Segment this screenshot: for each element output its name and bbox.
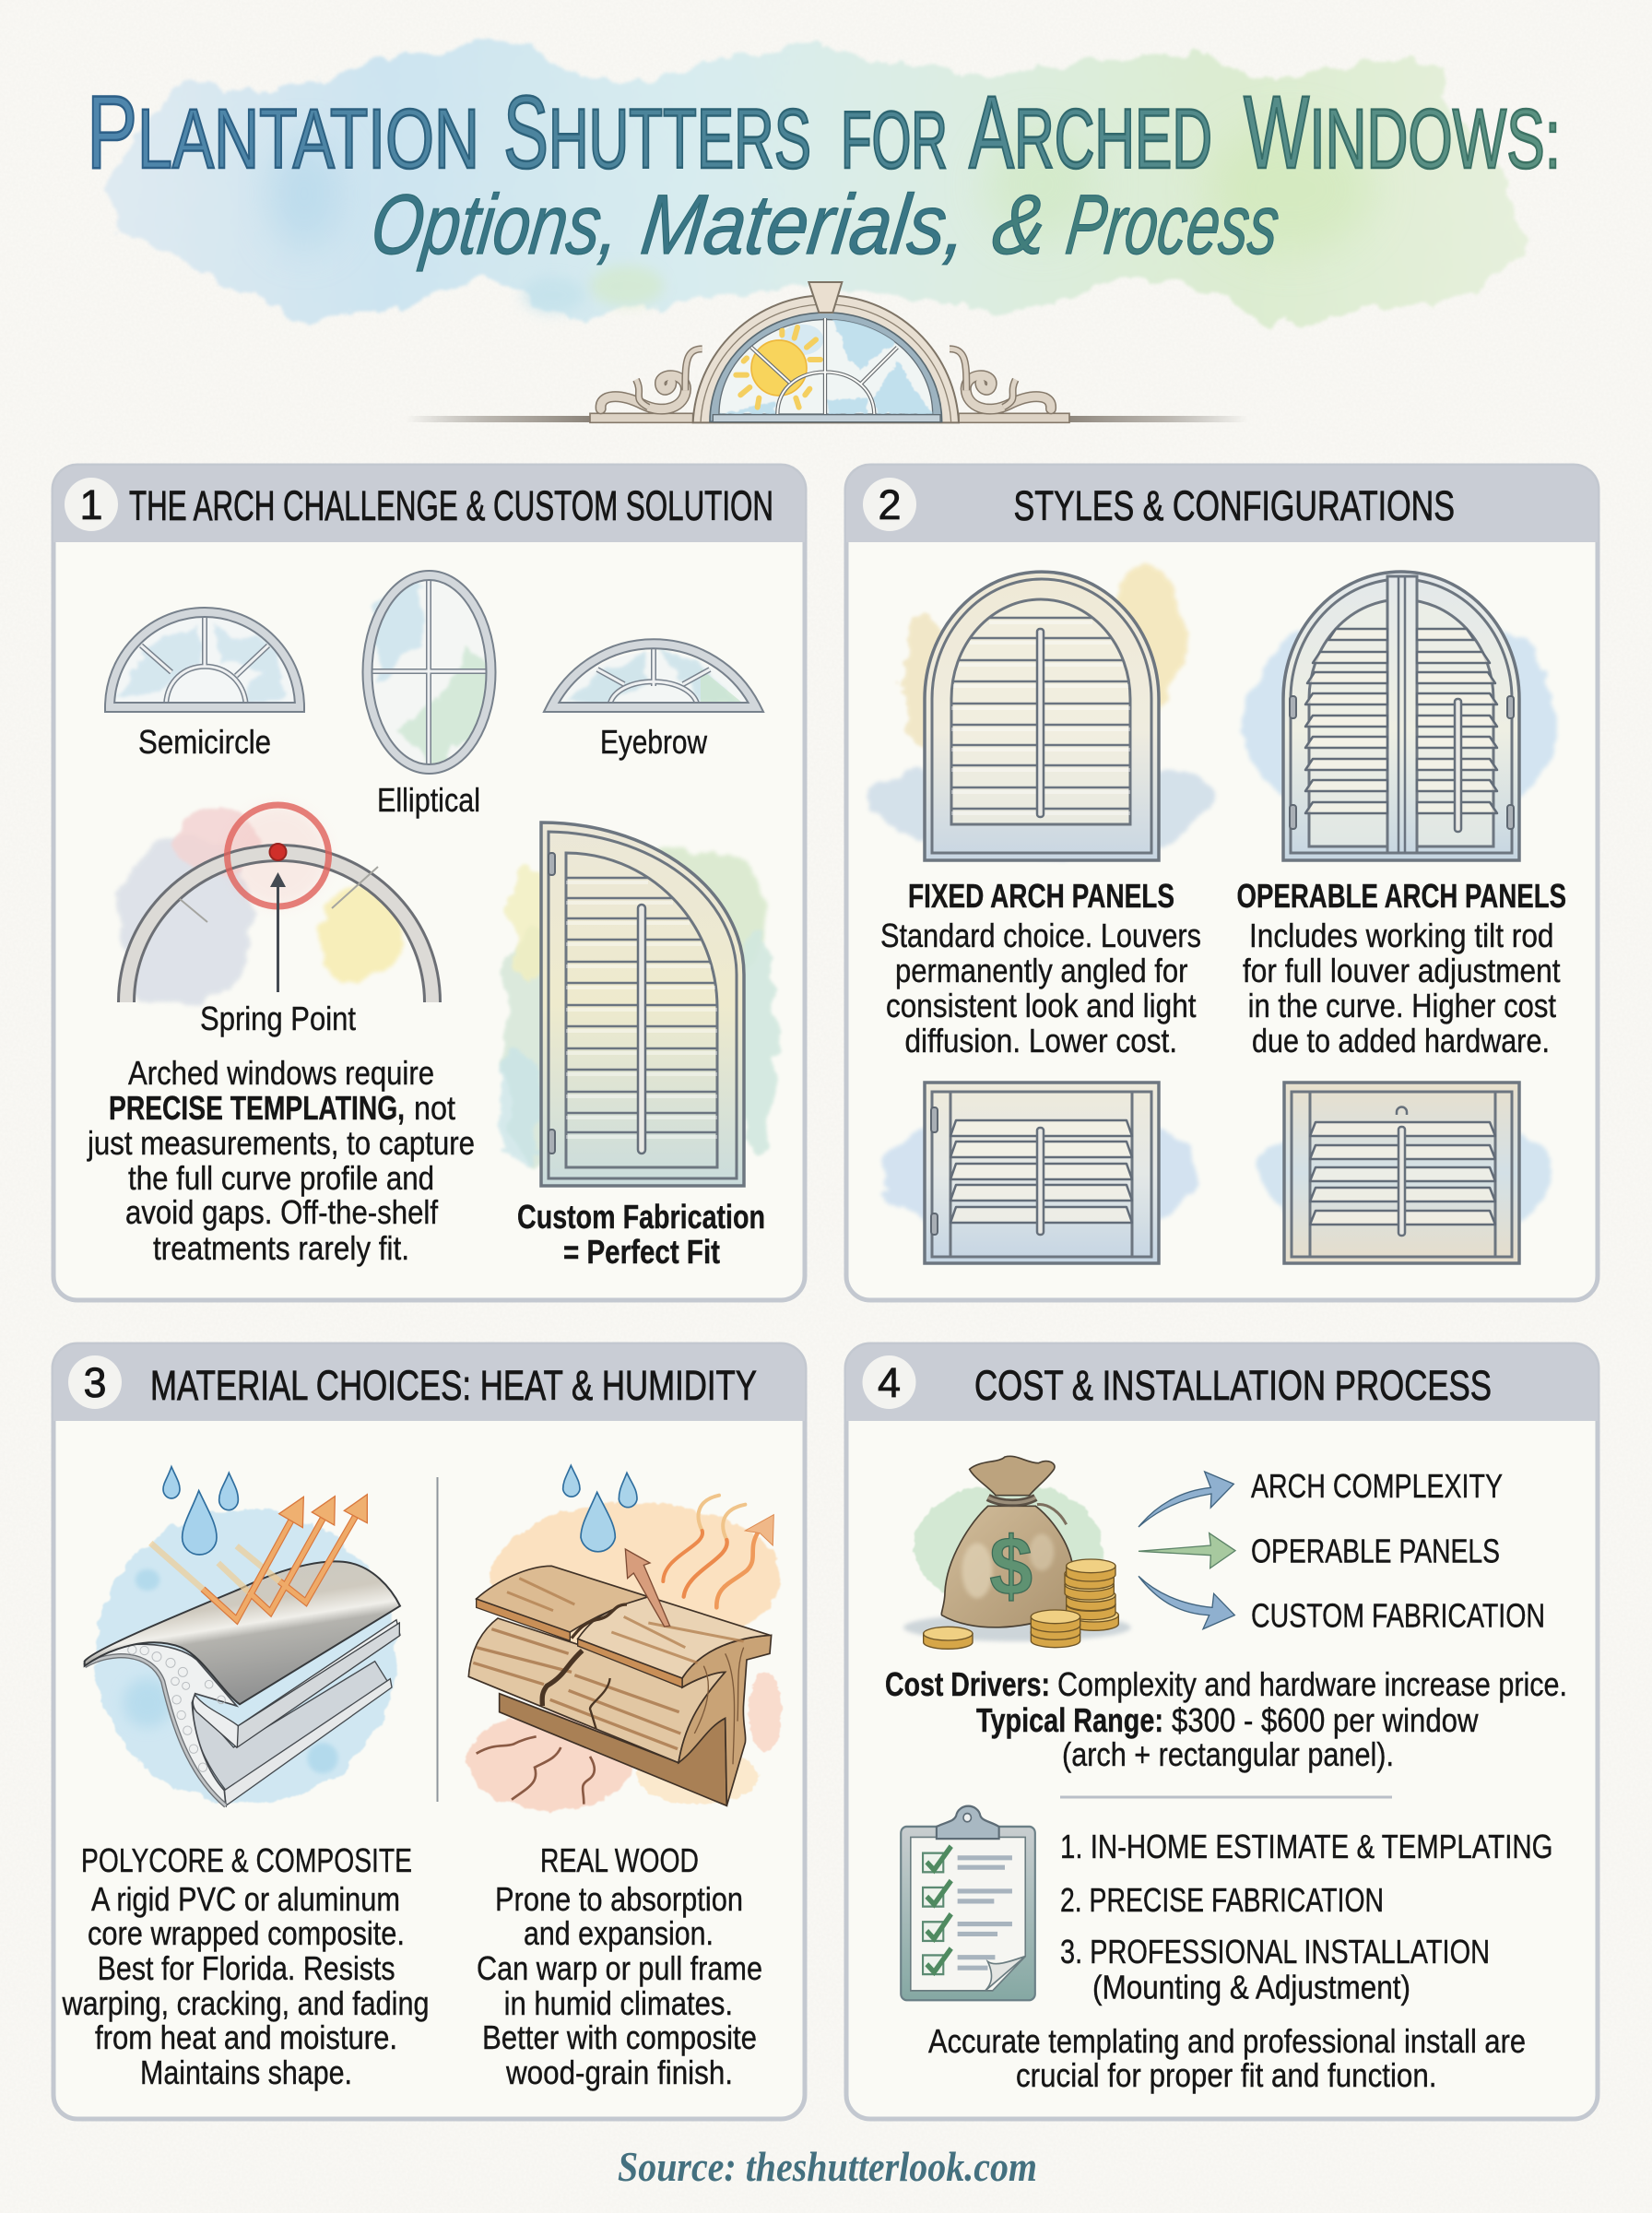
text: operable arch panels: Includes working tilt rod bbox=[1249, 917, 1554, 954]
text: operable arch panels: for full louver adjustment bbox=[1243, 952, 1560, 989]
text: cost summary bbox=[885, 1665, 1567, 1773]
icon: water drops bbox=[163, 1467, 238, 1555]
text: polycore and composite: Maintains shape. bbox=[140, 2053, 352, 2091]
text: polycore and composite: warping, cracking, and fading bbox=[62, 1984, 430, 2022]
illustration: polycore composite bbox=[85, 1467, 400, 1805]
icon: semicircle window: Semicircle bbox=[138, 723, 271, 761]
icon: eyebrow window bbox=[551, 644, 756, 761]
source line: Source: theshutterlook.com bbox=[618, 2143, 1037, 2190]
text: installation steps: 3. PROFESSIONAL INSTALLATION bbox=[1060, 1933, 1490, 1970]
caption: custom fabrication: Custom Fabrication bbox=[517, 1198, 765, 1236]
text: fixed arch panels: diffusion. Lower cost. bbox=[905, 1022, 1177, 1059]
text: fixed arch panels: FIXED ARCH PANELS bbox=[908, 877, 1174, 915]
text: installation steps: (Mounting & Adjustment) bbox=[1092, 1969, 1410, 2006]
illustration: operable arch shutter bbox=[1245, 572, 1558, 860]
divider bbox=[437, 1477, 439, 1802]
text: fixed arch panels: consistent look and light bbox=[886, 987, 1197, 1024]
panel 3 header: 3 bbox=[83, 1359, 107, 1406]
illustration: rectangular shutter, fixed bbox=[883, 1083, 1200, 1263]
header watercolor wash bbox=[106, 41, 1528, 325]
text: cost driver list: OPERABLE PANELS bbox=[1251, 1533, 1500, 1569]
arrow: operable panels bbox=[1139, 1533, 1235, 1568]
text: cost driver list: CUSTOM FABRICATION bbox=[1251, 1597, 1545, 1635]
text: polycore and composite: from heat and moisture. bbox=[95, 2018, 397, 2056]
panel 1 header: THE ARCH CHALLENGE & CUSTOM SOLUTION bbox=[129, 482, 773, 529]
subtitle: Options, bbox=[367, 176, 625, 272]
text: real wood: in humid climates. bbox=[504, 1984, 733, 2022]
text: operable arch panels bbox=[1237, 877, 1566, 1059]
text: fixed arch panels bbox=[880, 877, 1201, 1059]
icon: arched window with sun bbox=[406, 282, 1248, 422]
caption: custom fabrication: = Perfect Fit bbox=[563, 1233, 720, 1271]
diagram: spring point bbox=[115, 805, 432, 1037]
title bbox=[87, 75, 1561, 190]
text: closing note: Accurate templating and professional install are bbox=[928, 2022, 1526, 2060]
panel 1 header: 1 bbox=[79, 481, 103, 528]
illustration: rectangular shutter, operable bbox=[1258, 1083, 1553, 1263]
icon: heat waves bbox=[663, 1496, 759, 1607]
text: real wood bbox=[477, 1841, 762, 2091]
icon: expansion arrow bbox=[625, 1549, 670, 1627]
text: installation steps: 2. PRECISE FABRICATION bbox=[1060, 1881, 1384, 1919]
text: templating explanation: PRECISE TEMPLATING, bbox=[109, 1089, 405, 1127]
text: real wood: REAL WOOD bbox=[540, 1841, 699, 1879]
subtitle: Process bbox=[1062, 176, 1284, 272]
panel 4 header: COST & INSTALLATION PROCESS bbox=[974, 1362, 1492, 1409]
text: cost driver list: ARCH COMPLEXITY bbox=[1251, 1467, 1503, 1505]
title: PLANTATION bbox=[87, 75, 479, 190]
text: fixed arch panels: permanently angled for bbox=[895, 952, 1188, 989]
panel 3 header: MATERIAL CHOICES: HEAT & HUMIDITY bbox=[150, 1362, 757, 1409]
text: cost summary: $300 - $600 per window bbox=[1172, 1701, 1479, 1739]
text: cost summary: Cost Drivers: bbox=[885, 1665, 1050, 1703]
icon: reflected heat arrows bbox=[150, 1509, 360, 1620]
icon: money bag and coins bbox=[903, 1456, 1131, 1649]
text: polycore and composite: A rigid PVC or aluminum bbox=[91, 1880, 400, 1918]
panel 2 header: 2 bbox=[878, 481, 902, 528]
subtitle bbox=[367, 176, 1284, 272]
arrow: arch complexity bbox=[1139, 1472, 1233, 1527]
text: real wood: Can warp or pull frame bbox=[477, 1949, 762, 1987]
panel 4: cost and installation bbox=[846, 1344, 1598, 2119]
text: polycore and composite: POLYCORE & COMPOSITE bbox=[81, 1841, 412, 1879]
panel 4 header bbox=[846, 1344, 1598, 1421]
title: FOR bbox=[841, 94, 948, 185]
text: polycore and composite: Best for Florida. Resists bbox=[98, 1949, 395, 1987]
text: polycore and composite bbox=[62, 1841, 430, 2091]
text: templating explanation bbox=[87, 1054, 475, 1267]
text: cost driver list bbox=[1251, 1467, 1545, 1635]
text: cost summary: Complexity and hardware increase price. bbox=[1057, 1665, 1567, 1703]
text: templating explanation: not bbox=[414, 1089, 455, 1127]
title: ARCHED bbox=[969, 75, 1212, 190]
icon: elliptical window: Elliptical bbox=[377, 781, 480, 819]
icon: semicircle window bbox=[110, 612, 300, 761]
text: closing note: crucial for proper fit and function. bbox=[1016, 2056, 1436, 2094]
panel 4 header: 4 bbox=[878, 1359, 901, 1406]
text: cost summary: Typical Range: bbox=[976, 1701, 1163, 1739]
icon: money bag and coins: $ bbox=[989, 1521, 1032, 1613]
panel 2 header: STYLES & CONFIGURATIONS bbox=[1014, 482, 1455, 529]
panel 3 header bbox=[53, 1344, 805, 1421]
text: templating explanation: Arched windows require bbox=[128, 1054, 434, 1092]
text: fixed arch panels: Standard choice. Louvers bbox=[880, 917, 1201, 954]
illustration: custom arch shutter bbox=[499, 822, 776, 1186]
icon: water drops and moisture bbox=[563, 1465, 637, 1552]
text: real wood: and expansion. bbox=[524, 1914, 714, 1952]
illustration: real wood bbox=[467, 1465, 782, 1810]
illustration: fixed arch shutter bbox=[871, 572, 1212, 860]
text: real wood: Prone to absorption bbox=[495, 1880, 743, 1918]
icon: eyebrow window: Eyebrow bbox=[600, 723, 708, 761]
text: installation steps bbox=[1060, 1828, 1552, 2006]
text: operable arch panels: in the curve. Higher cost bbox=[1248, 987, 1556, 1024]
subtitle: Materials, bbox=[637, 176, 973, 272]
panel 1: the arch challenge bbox=[53, 466, 805, 1300]
text: polycore and composite: core wrapped composite. bbox=[88, 1914, 405, 1952]
text: real wood: Better with composite bbox=[482, 2018, 757, 2056]
title: SHUTTERS bbox=[503, 75, 811, 190]
text: closing note bbox=[928, 2022, 1526, 2094]
arrow: custom fabrication bbox=[1139, 1576, 1234, 1629]
panel 3: material choices bbox=[53, 1344, 805, 2119]
text: templating explanation: just measurements, to capture bbox=[87, 1124, 475, 1162]
subtitle: & bbox=[988, 176, 1052, 272]
text: templating explanation: avoid gaps. Off-the-shelf bbox=[125, 1193, 439, 1231]
caption: custom fabrication bbox=[517, 1198, 765, 1271]
diagram: spring point: Spring Point bbox=[200, 1000, 356, 1037]
text: real wood: wood-grain finish. bbox=[505, 2053, 733, 2091]
text: installation steps: 1. IN-HOME ESTIMATE & TEMPLATING bbox=[1060, 1828, 1552, 1865]
panel 1 header bbox=[53, 466, 805, 542]
text: operable arch panels: due to added hardware. bbox=[1252, 1022, 1550, 1059]
panel 2 header bbox=[846, 466, 1598, 542]
text: templating explanation: treatments rarely fit. bbox=[153, 1229, 409, 1267]
text: templating explanation: the full curve profile and bbox=[128, 1159, 434, 1197]
text: cost summary: (arch + rectangular panel). bbox=[1062, 1735, 1394, 1773]
panel 2: styles and configurations bbox=[846, 466, 1598, 1300]
icon: elliptical window bbox=[367, 574, 490, 819]
icon: clipboard checklist bbox=[901, 1806, 1035, 2000]
